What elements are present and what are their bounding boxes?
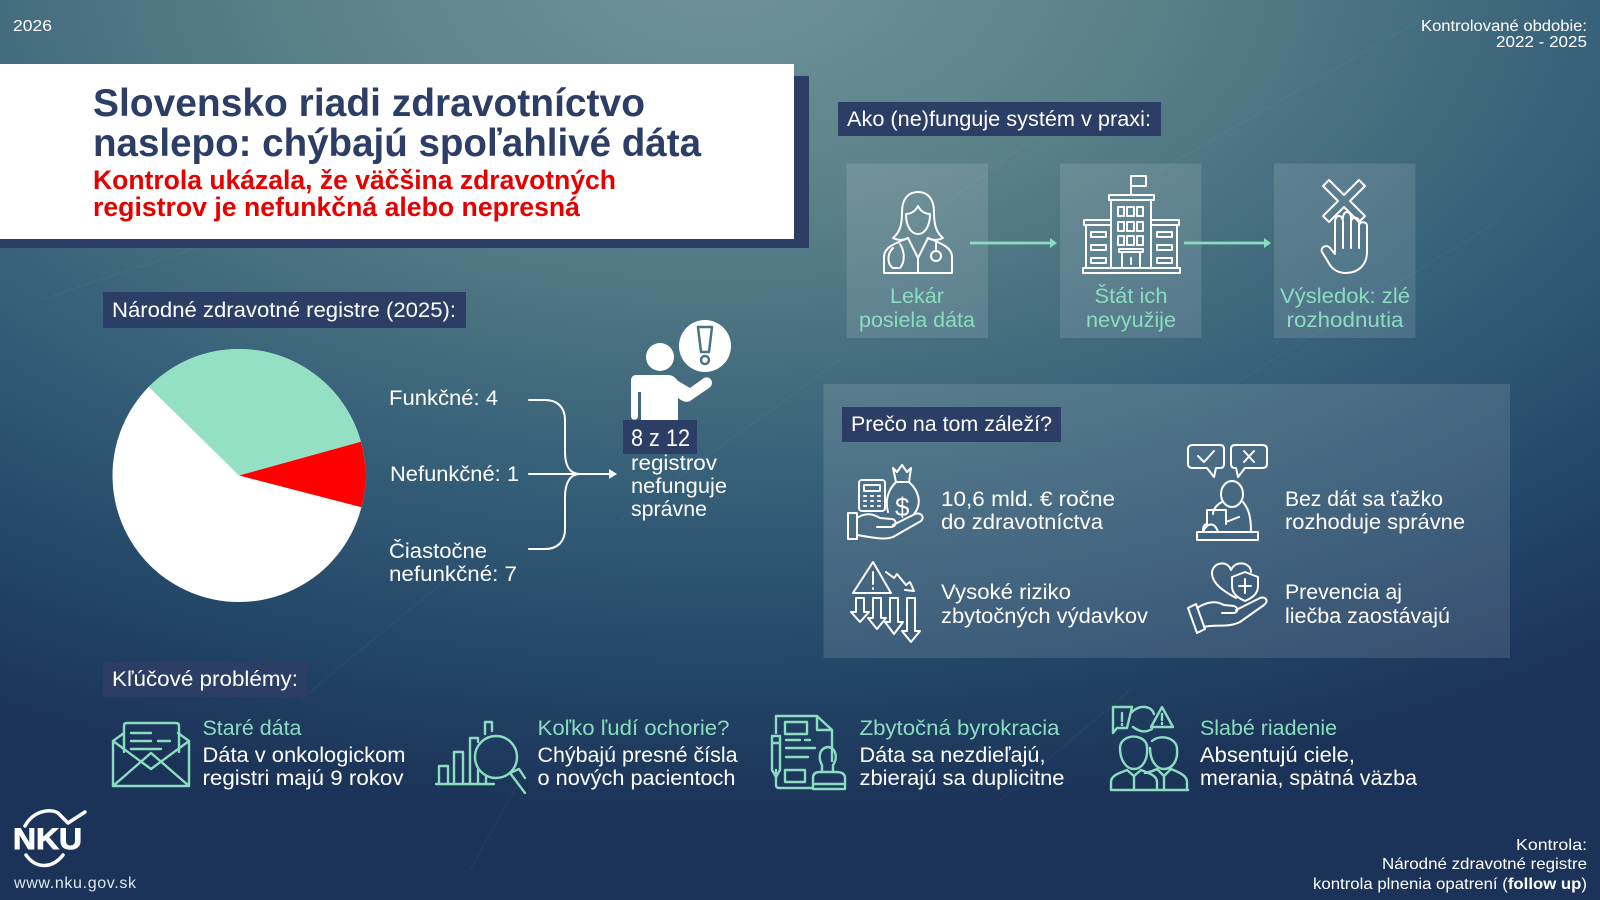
- problem: needless bureaucracy: Dáta sa nezdieľajú,: [860, 744, 1046, 767]
- problem: old data: [113, 717, 406, 790]
- audited period: 2022 - 2025: [1496, 34, 1587, 51]
- panel: result step: Výsledok: zlé: [1280, 285, 1410, 308]
- website: www.nku.gov.sk: [13, 875, 137, 892]
- problem: weak management: merania, spätná väzba: [1200, 767, 1417, 790]
- problem: needless bureaucracy: [772, 716, 1064, 790]
- logo: NKU: NKU: [13, 823, 82, 856]
- icon: building: [1083, 176, 1180, 273]
- icon: doctor: [884, 192, 952, 273]
- text: prevention: liečba zaostávajú: [1285, 605, 1450, 628]
- title panel: naslepo: chýbajú spoľahlivé dáta: [93, 122, 701, 165]
- text: hard to decide: [1285, 488, 1465, 534]
- heading: key problems: [103, 662, 307, 697]
- arrow: state to result: [1184, 238, 1271, 248]
- callout: 8 of 12: [623, 420, 727, 521]
- problem: needless bureaucracy: Zbytočná byrokracia: [860, 717, 1060, 740]
- panel: state step: Štát ich: [1094, 285, 1168, 308]
- callout: 8 of 12: správne: [631, 498, 707, 521]
- audit note: [1313, 837, 1587, 893]
- panel: doctor step: [846, 164, 988, 338]
- title panel: registrov je nefunkčná alebo nepresná: [93, 192, 581, 222]
- problem: old data: Dáta v onkologickom: [202, 744, 406, 767]
- icon: money in hand: $: [895, 492, 910, 522]
- problem: how many people fall ill: Chýbajú presné čísla: [538, 744, 738, 767]
- pie legend labels: Čiastočne: [389, 540, 487, 563]
- icon: two people with warnings: [1111, 707, 1188, 790]
- problem: weak management: Absentujú ciele,: [1200, 744, 1355, 767]
- problem: how many people fall ill: o nových pacientoch: [538, 767, 736, 790]
- heading: national registers: [103, 292, 466, 328]
- problem: needless bureaucracy: zbierajú sa duplicitne: [860, 767, 1064, 790]
- panel: result step: rozhodnutia: [1286, 309, 1404, 332]
- audit note: kontrola plnenia opatrení ( follow up): [1313, 876, 1587, 893]
- heading: national registers: Národné zdravotné registre (2025):: [112, 299, 456, 322]
- callout: 8 of 12: 8 z 12: [631, 425, 690, 452]
- text: prevention: Prevencia aj: [1285, 581, 1402, 604]
- problem: how many people fall ill: [436, 717, 738, 793]
- logo: NKU: [13, 811, 85, 866]
- icon: money in hand: [848, 465, 923, 539]
- text: 10.6 billion: [941, 488, 1115, 534]
- icon: heart and shield in hand: [1188, 563, 1267, 633]
- panel: doctor step: Lekár: [890, 285, 944, 308]
- callout: 8 of 12: nefunguje: [631, 475, 727, 498]
- text: prevention: [1285, 581, 1450, 628]
- pie legend labels: Nefunkčné: 1: [390, 463, 519, 486]
- arrow: doctor to state: [970, 238, 1057, 248]
- bracket arrow: [529, 400, 617, 549]
- heading: system in practice: Ako (ne)funguje systém v praxi:: [847, 108, 1151, 131]
- heading: key problems: Kľúčové problémy:: [112, 668, 298, 691]
- icon: hand with X: [1322, 180, 1367, 273]
- pie chart: [112, 349, 366, 602]
- problem: old data: registri majú 9 rokov: [202, 767, 404, 790]
- icon: person with exclamation: [631, 320, 731, 420]
- text: hard to decide: rozhoduje správne: [1285, 511, 1465, 534]
- text: high risk: [941, 581, 1149, 628]
- text: 10.6 billion: do zdravotníctva: [941, 511, 1103, 534]
- panel: why it matters: [824, 384, 1510, 658]
- audited period: [1421, 18, 1587, 51]
- icon: chart with magnifier: [436, 722, 525, 793]
- audited period: Kontrolované obdobie:: [1421, 18, 1587, 35]
- icon: risk and falling arrows: [851, 562, 920, 642]
- pie legend labels: Funkčné: 4: [389, 387, 498, 410]
- heading: why it matters: Prečo na tom záleží?: [851, 413, 1052, 436]
- panel: doctor step: posiela dáta: [859, 309, 975, 332]
- title panel: Kontrola ukázala, že väčšina zdravotných: [93, 165, 616, 195]
- title panel: [0, 64, 809, 248]
- pie legend labels: nefunkčné: 7: [389, 563, 517, 586]
- audit note: Kontrola:: [1516, 837, 1587, 854]
- heading: why it matters: [842, 407, 1061, 442]
- year label: 2026: [13, 18, 52, 35]
- icon: envelope: [113, 723, 189, 786]
- heading: system in practice: [838, 102, 1161, 136]
- problem: how many people fall ill: Koľko ľudí ochorie?: [538, 717, 730, 740]
- text: hard to decide: Bez dát sa ťažko: [1285, 488, 1443, 511]
- audit note: Národné zdravotné registre: [1382, 856, 1587, 873]
- callout: 8 of 12: registrov: [631, 452, 718, 475]
- panel: state step: [1060, 164, 1202, 338]
- problem: weak management: Slabé riadenie: [1200, 717, 1337, 740]
- title panel: Slovensko riadi zdravotníctvo: [93, 82, 645, 125]
- icon: person deciding: [1188, 445, 1267, 540]
- pie legend labels: [389, 387, 519, 586]
- panel: result step: [1274, 164, 1416, 338]
- icon: document with stamp: [772, 716, 845, 789]
- problem: weak management: [1111, 707, 1417, 790]
- problem: old data: Staré dáta: [202, 717, 302, 740]
- text: high risk: Vysoké riziko: [941, 581, 1071, 604]
- panel: state step: nevyužije: [1086, 309, 1176, 332]
- text: high risk: zbytočných výdavkov: [941, 605, 1149, 628]
- text: 10.6 billion: 10,6 mld. € ročne: [941, 488, 1115, 511]
